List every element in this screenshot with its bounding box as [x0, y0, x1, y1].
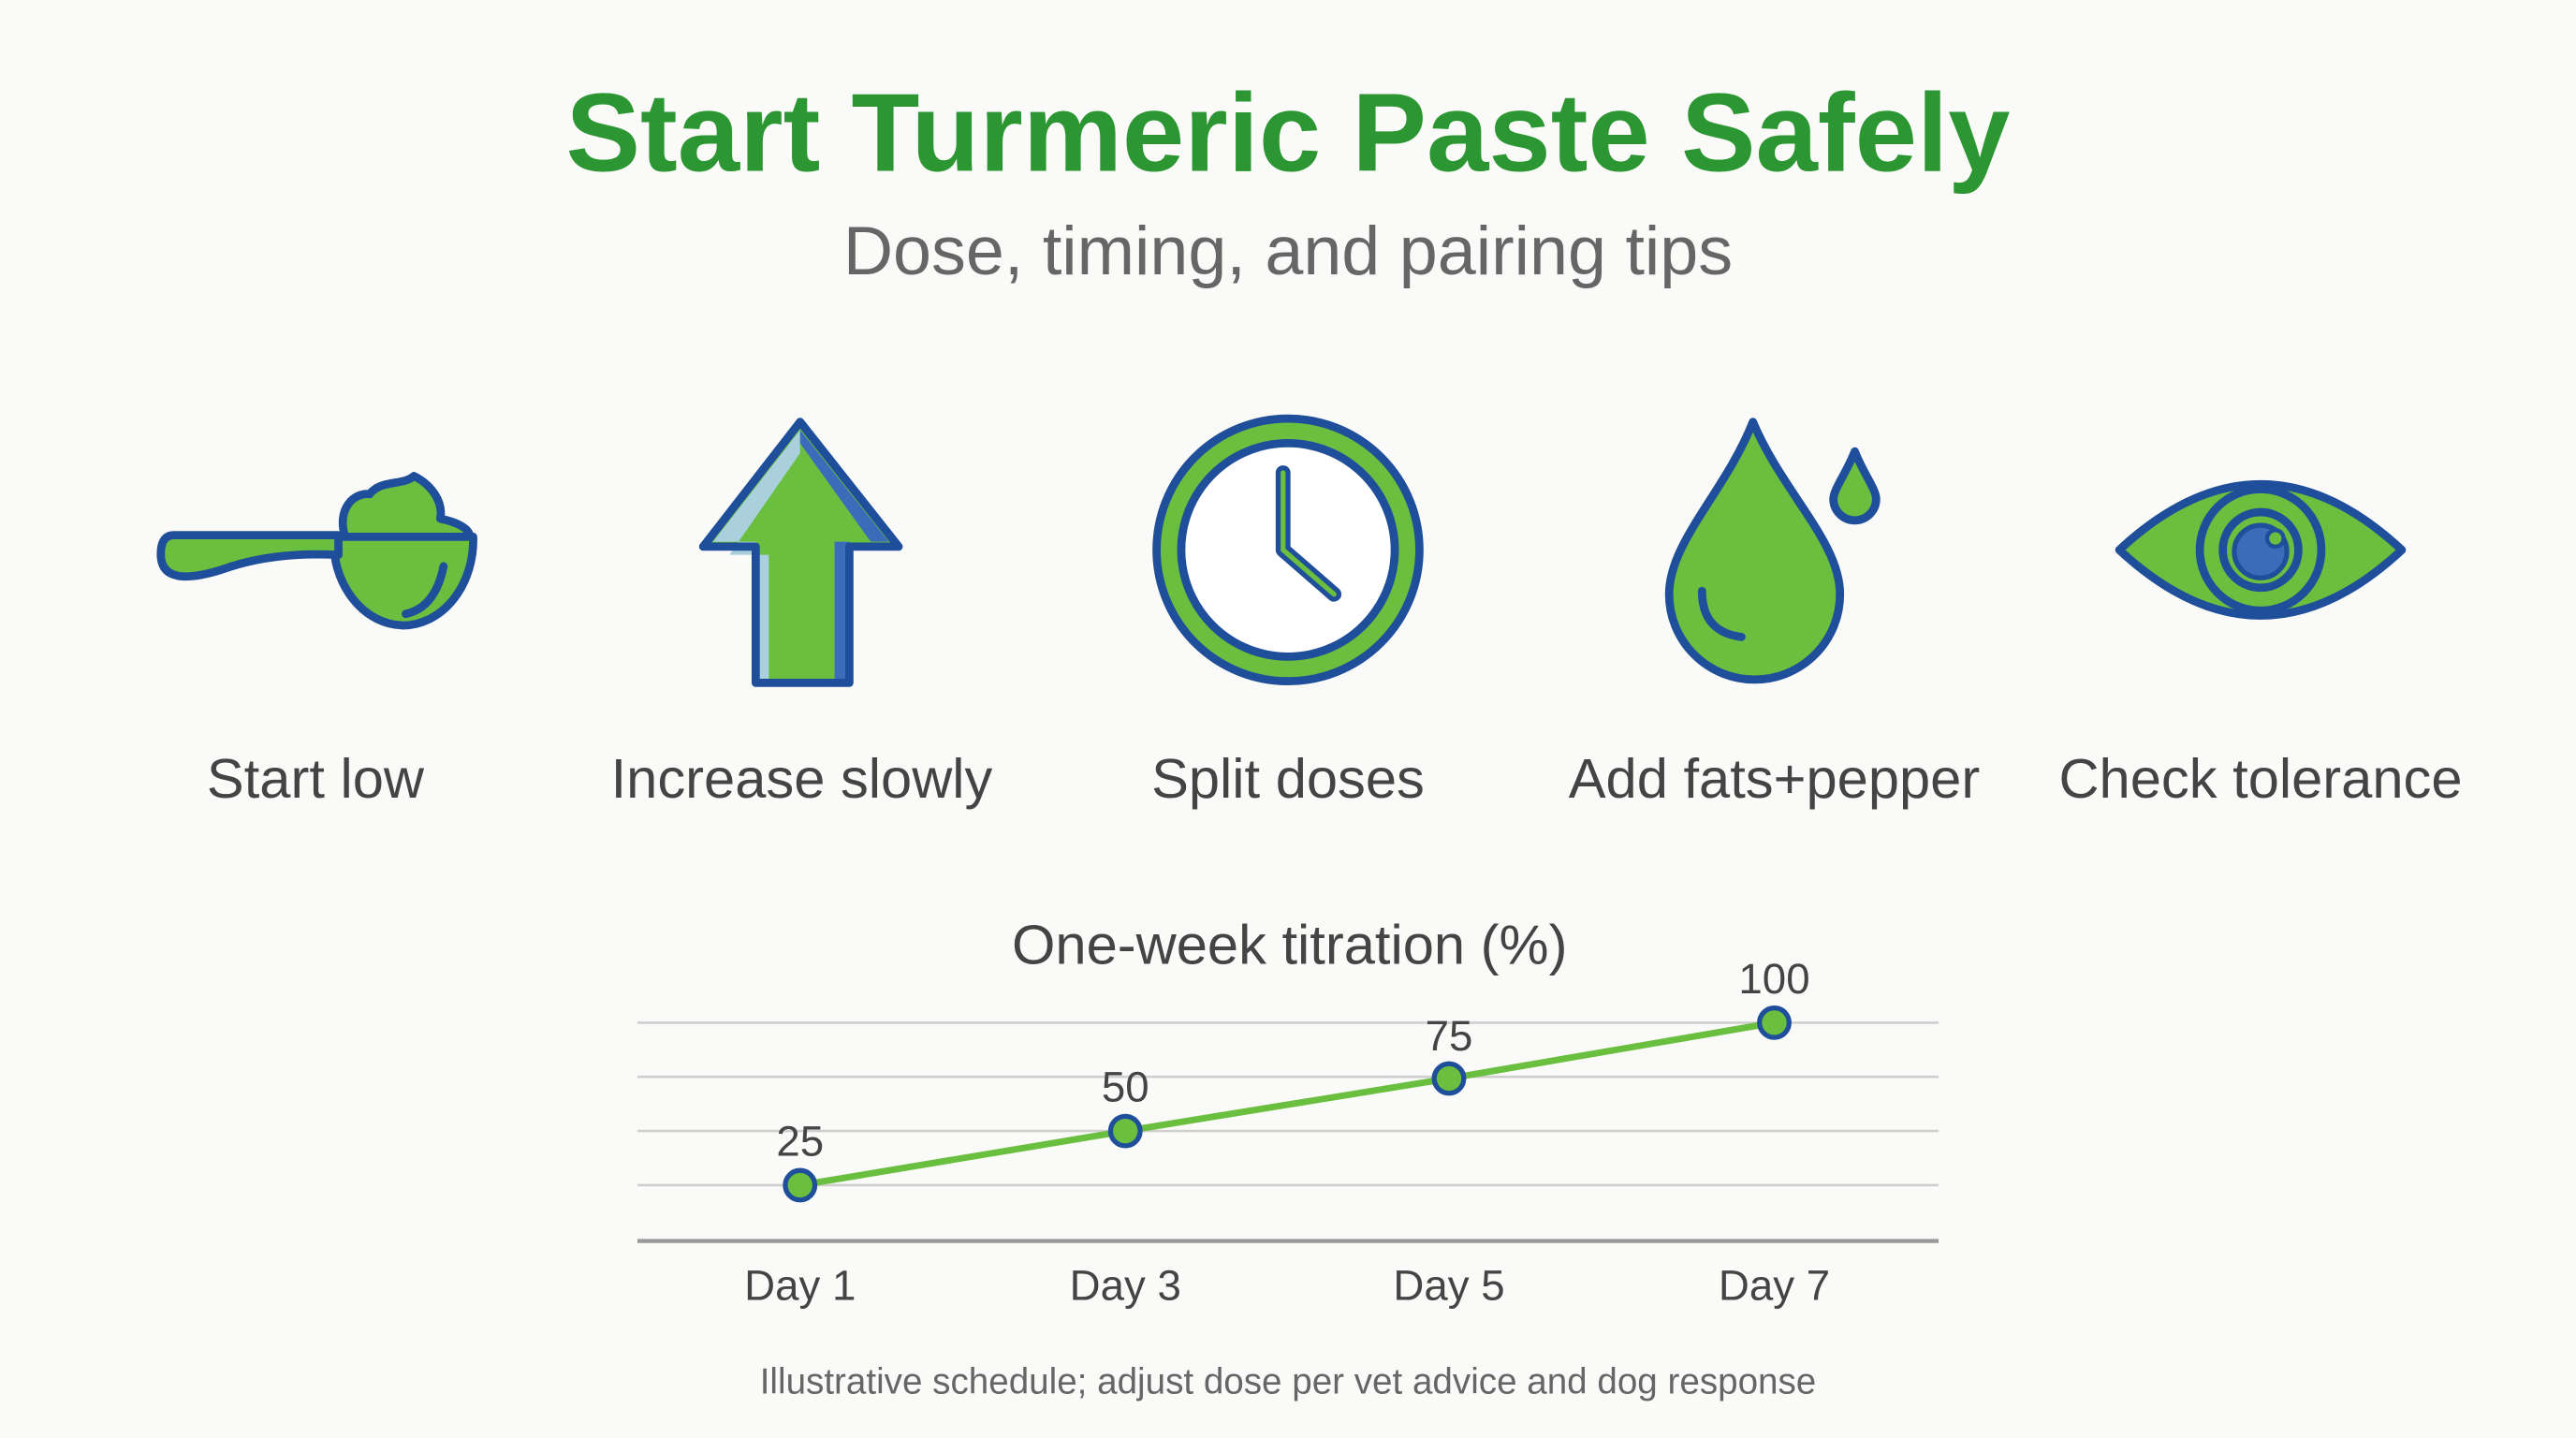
line chart: Day 7 [1719, 1262, 1830, 1310]
chart title: One-week titration (%) [1012, 913, 1567, 976]
labels [207, 747, 2463, 810]
labels: Start low [207, 747, 425, 810]
labels: Check tolerance [2058, 747, 2463, 810]
labels: Add fats+pepper [1569, 747, 1980, 810]
line chart: 75 [1426, 1012, 1472, 1060]
labels: Split doses [1151, 747, 1425, 810]
footnote: Illustrative schedule; adjust dose per vet advice and dog response [760, 1362, 1816, 1402]
title: Start Turmeric Paste Safely [565, 70, 2011, 195]
line chart: 50 [1102, 1064, 1149, 1111]
line chart: Day 3 [1070, 1262, 1181, 1310]
icon: spoon [161, 476, 474, 625]
labels: Increase slowly [611, 747, 993, 810]
line chart [637, 955, 1939, 1310]
line chart: 25 [776, 1117, 824, 1165]
line chart: Day 5 [1393, 1262, 1505, 1310]
icon: oil drops [1669, 422, 1876, 680]
icon: eye [2119, 484, 2402, 616]
icon: up arrow [703, 422, 899, 682]
line chart: 100 [1738, 955, 1810, 1003]
icon: clock [1157, 418, 1419, 682]
subtitle: Dose, timing, and pairing tips [843, 212, 1733, 289]
line chart: Day 1 [744, 1262, 856, 1310]
